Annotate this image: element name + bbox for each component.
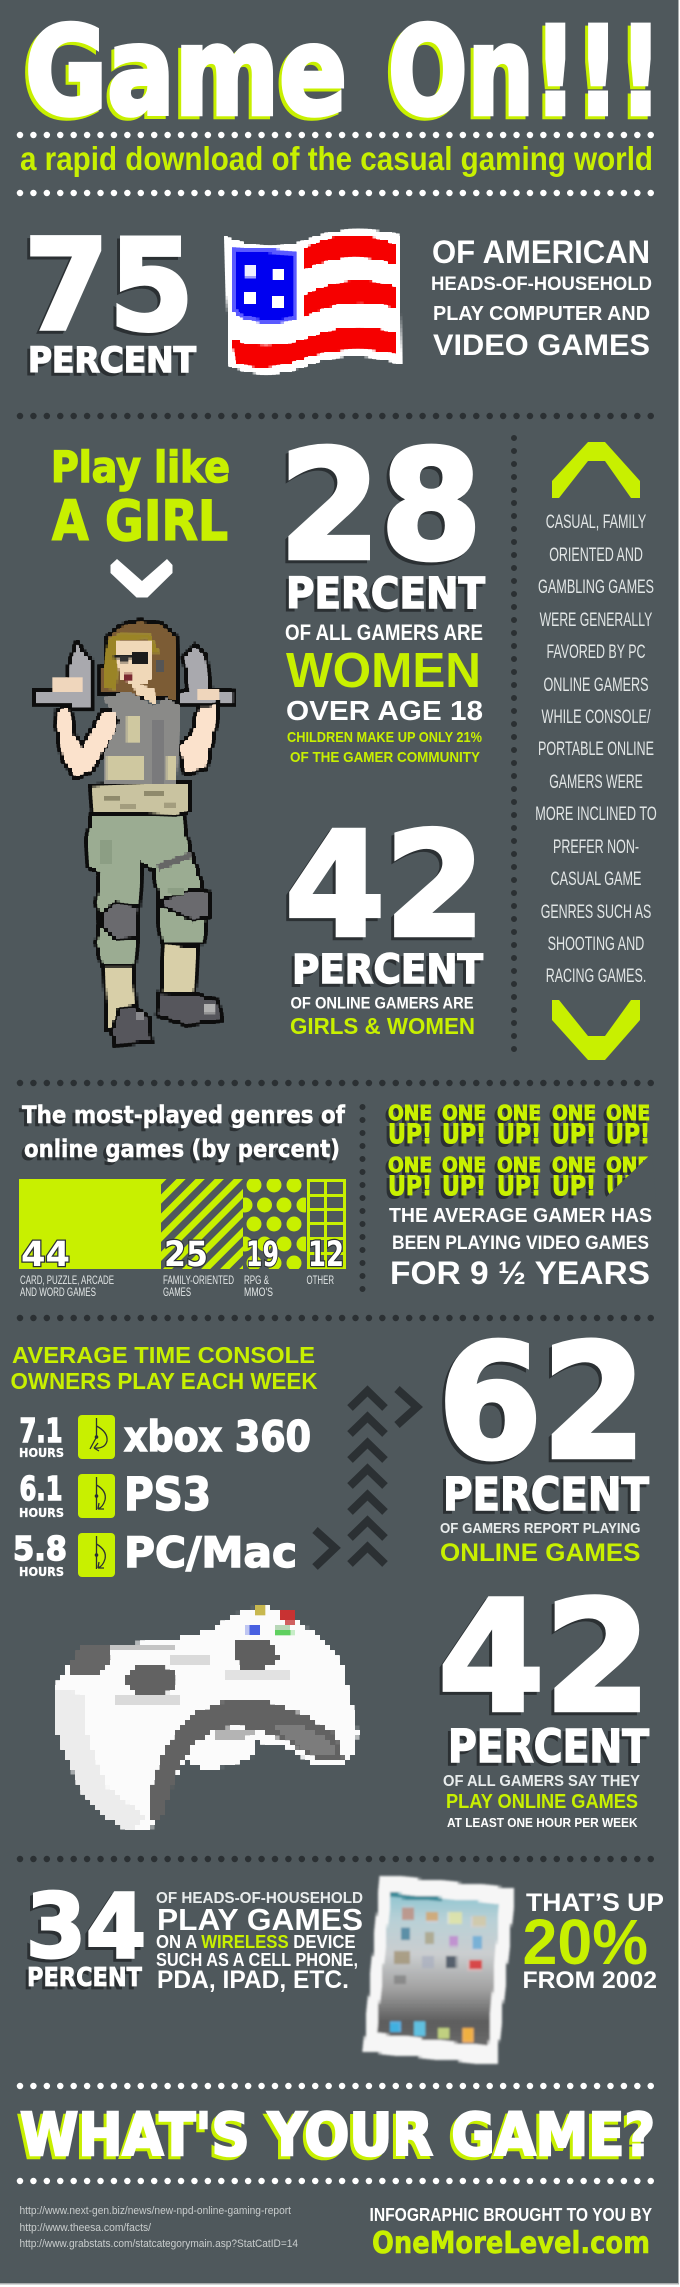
heading: average time xyxy=(10,1342,318,1394)
text block: play games on a wireless device: PDA, IPAD, ETC. xyxy=(157,1966,349,1994)
values xyxy=(21,1235,344,1275)
text block: of all gamers are women: OF THE GAMER COMMUNITY xyxy=(290,749,480,766)
row: xbox 360 xyxy=(19,1411,311,1461)
stat: 28 percent: 28 xyxy=(279,418,482,594)
stat: 42 percent: 42 xyxy=(438,1569,651,1747)
text block: of American heads-of-household xyxy=(431,234,652,362)
one up tally: ONE xyxy=(388,1153,432,1177)
heading: most-played genres xyxy=(22,1101,345,1163)
text block: report playing online games: ONLINE GAMES xyxy=(440,1539,640,1567)
icon: clock 6.1 xyxy=(78,1474,115,1518)
heading: most-played genres: The most-played genres of xyxy=(22,1101,345,1129)
illustration: pixel gamer girl xyxy=(33,620,235,1045)
stat: 42 percent: PERCENT xyxy=(292,947,484,993)
one up tally: UP! xyxy=(606,1119,650,1150)
panel: 62 percent online games xyxy=(438,1311,649,1567)
one up tally xyxy=(388,1101,656,1202)
text block: of American heads-of-household: HEADS-OF-HOUSEHOLD xyxy=(431,274,652,295)
heading: most-played genres: online games (by percent) xyxy=(24,1135,340,1163)
row: PC and Mac: HOURS xyxy=(19,1564,64,1579)
bar: card, puzzle, arcade 44 xyxy=(19,1179,161,1269)
text block: play online games per week: PLAY ONLINE GAMES xyxy=(446,1791,638,1813)
text block: of all gamers are women: CHILDREN MAKE UP ONLY 21% xyxy=(287,729,482,746)
stat: 28 percent: PERCENT xyxy=(286,569,486,619)
illustration: game controller xyxy=(55,1605,358,1832)
text block: play games on a wireless device xyxy=(156,1890,363,1994)
panel: most-played genres chart xyxy=(19,1101,346,1299)
bar: RPG and MMO 19 xyxy=(243,1179,306,1269)
heading: play like a girl xyxy=(51,443,230,553)
one up tally: UP! xyxy=(497,1171,541,1202)
text block: average gamer years: BEEN PLAYING VIDEO GAMES xyxy=(392,1233,649,1254)
sources xyxy=(20,2205,298,2250)
text block: play online games per week: AT LEAST ONE HOUR PER WEEK xyxy=(447,1815,638,1830)
values: 25 xyxy=(164,1235,208,1275)
text block: play online games per week: OF ALL GAMERS SAY THEY xyxy=(443,1773,640,1790)
text block: report playing online games: OF GAMERS REPORT PLAYING xyxy=(440,1520,640,1537)
stat: 42 percent: PERCENT xyxy=(448,1720,649,1773)
stat: 62 percent: 62 xyxy=(438,1311,646,1495)
text block: average gamer years: FOR 9 ½ YEARS xyxy=(390,1255,650,1291)
text block: play games on a wireless device: OF HEADS-OF-HOUSEHOLD xyxy=(156,1890,363,1907)
row: PS3: HOURS xyxy=(19,1505,64,1520)
text block: of online gamers are girls and women xyxy=(290,994,475,1039)
sources: http://www.grabstats.com/statcategorymain.asp?StatCatID=14 xyxy=(20,2238,298,2250)
text block: of all gamers are women xyxy=(285,620,483,766)
category labels: AND WORD GAMES xyxy=(20,1285,96,1299)
row: PS3: 6.1 xyxy=(20,1469,62,1508)
values: 12 xyxy=(308,1235,344,1275)
text block: of all gamers are women: WOMEN xyxy=(286,644,481,698)
icon: yellow chevron down xyxy=(552,1000,640,1060)
one up tally: UP! xyxy=(552,1119,596,1150)
icon: yellow chevron up xyxy=(552,442,640,498)
arrows: dark chevrons connector xyxy=(315,1389,417,1567)
category labels: MMO'S xyxy=(244,1285,273,1299)
one up tally: ONE xyxy=(552,1153,596,1177)
title xyxy=(25,1,662,143)
category labels: GAMES xyxy=(163,1285,191,1299)
one up tally: ONE xyxy=(388,1101,432,1125)
text block: play games on a wireless device: ON A WIRELESS DEVICE xyxy=(156,1932,356,1952)
category labels: OTHER xyxy=(306,1273,334,1287)
text block: play online games per week xyxy=(443,1773,640,1830)
one up tally: ONE xyxy=(606,1153,650,1177)
sources: http://www.theesa.com/facts/ xyxy=(20,2222,152,2234)
icon: clock 5.8 xyxy=(78,1533,115,1577)
category labels: RPG & xyxy=(244,1273,269,1287)
one up tally: ONE xyxy=(552,1101,596,1125)
panel: 75 percent of American heads of household xyxy=(24,212,652,381)
title: Game xyxy=(25,1,347,143)
panel: 28 percent of gamers are women xyxy=(279,418,486,1039)
stat: 75 percent: 75 xyxy=(24,212,194,359)
text block: average gamer years: THE AVERAGE GAMER HAS xyxy=(389,1205,652,1227)
row: xbox 360: xbox 360 xyxy=(124,1412,311,1461)
heading: average time: AVERAGE TIME CONSOLE xyxy=(12,1342,315,1368)
category labels: FAMILY-ORIENTED xyxy=(163,1273,234,1287)
text block: of online gamers are girls and women: GIRLS & WOMEN xyxy=(290,1013,475,1039)
text block: up 20 percent from 2002: THAT’S UP xyxy=(526,1889,664,1917)
row: PS3: PS3 xyxy=(124,1468,211,1521)
stat: 75 percent: PERCENT xyxy=(28,341,196,381)
text block: up 20 percent from 2002: 20% xyxy=(522,1906,648,1978)
text block: play games on a wireless device: SUCH AS A CELL PHONE, xyxy=(156,1950,358,1970)
one up tally: UP! xyxy=(388,1171,432,1202)
panel: 34 percent wireless devices xyxy=(26,1875,664,2065)
stat: 62 percent: PERCENT xyxy=(443,1468,649,1521)
one up tally: ONE xyxy=(497,1101,541,1125)
heading: play like a girl: Play like xyxy=(51,443,230,493)
values: 19 xyxy=(246,1235,279,1275)
one up tally: UP! xyxy=(497,1119,541,1150)
illustration: iPad tablet xyxy=(363,1875,515,2065)
one up tally: ONE xyxy=(497,1153,541,1177)
row: PC and Mac: 5.8 xyxy=(13,1529,67,1568)
text block: report playing online games xyxy=(440,1520,640,1567)
one up tally: UP! xyxy=(442,1171,486,1202)
text block: average gamer years xyxy=(389,1205,652,1291)
text block: of online gamers are girls and women: OF ONLINE GAMERS ARE xyxy=(290,994,474,1012)
category labels xyxy=(20,1273,334,1299)
text block: up 20 percent from 2002: FROM 2002 xyxy=(522,1967,657,1994)
one up tally: UP! xyxy=(388,1119,432,1150)
text block: of American heads-of-household: VIDEO GAMES xyxy=(433,329,650,362)
stat: 34 percent: 34 xyxy=(26,1875,146,1978)
text block: of American heads-of-household: OF AMERICAN xyxy=(432,234,650,270)
one up tally: ONE xyxy=(442,1153,486,1177)
panel: casual and family games column xyxy=(535,442,657,1060)
row: xbox 360: 7.1 xyxy=(20,1411,62,1450)
row: PS3 xyxy=(19,1468,211,1521)
bar: family-oriented 25 xyxy=(161,1179,243,1269)
panel: one up average gamer years xyxy=(388,1101,656,1291)
one up tally: UP! xyxy=(552,1171,596,1202)
row: PC and Mac: PC/Mac xyxy=(124,1528,297,1577)
one up tally: ONE xyxy=(606,1101,650,1125)
bar chart: genres by percent xyxy=(19,1178,346,1299)
one up tally: UP! xyxy=(606,1171,650,1202)
heading: play like a girl: A GIRL xyxy=(52,489,228,553)
stat: 34 percent: PERCENT xyxy=(27,1963,142,1993)
icon: white chevron down xyxy=(110,559,172,598)
panel: 42 percent of all gamers xyxy=(438,1569,651,1830)
stat: 42 percent: 42 xyxy=(285,801,485,969)
icon: clock 7.1 xyxy=(78,1415,115,1459)
credit: OneMoreLevel xyxy=(370,2205,652,2261)
text block: of all gamers are women: OVER AGE 18 xyxy=(286,695,483,726)
one up tally: ONE xyxy=(442,1101,486,1125)
values: 44 xyxy=(21,1235,70,1275)
heading: average time: OWNERS PLAY EACH WEEK xyxy=(10,1368,318,1394)
row: xbox 360: HOURS xyxy=(19,1445,64,1460)
panel: average time console owners play xyxy=(10,1342,417,1579)
row: PC and Mac xyxy=(13,1528,297,1579)
bar: other 12 xyxy=(307,1179,346,1269)
text block: play games on a wireless device: PLAY GAMES xyxy=(157,1902,363,1937)
text block: up 20 percent from 2002 xyxy=(522,1889,664,1994)
icon: American flag xyxy=(225,230,402,374)
text block: genre preferences xyxy=(535,512,657,987)
text block: of American heads-of-household: PLAY COMPUTER AND xyxy=(433,303,650,325)
panel: play like a girl xyxy=(33,443,235,1045)
text block: of all gamers are women: OF ALL GAMERS ARE xyxy=(285,620,483,645)
sources: http://www.next-gen.biz/news/new-npd-online-gaming-report xyxy=(20,2205,291,2217)
text block: genre preferences: PREFER NON- xyxy=(553,837,639,858)
category labels: CARD, PUZZLE, ARCADE xyxy=(20,1273,114,1287)
one up tally: UP! xyxy=(442,1119,486,1150)
